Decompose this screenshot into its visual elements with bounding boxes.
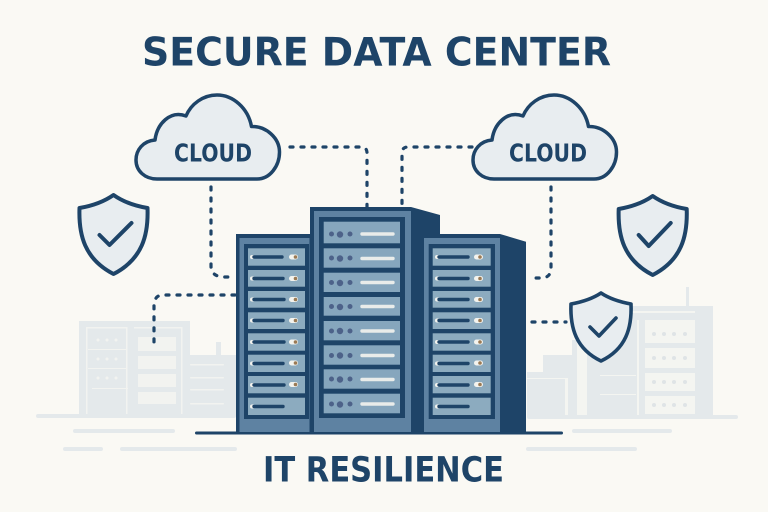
rack units — [433, 248, 491, 415]
background: right faded building — [526, 287, 738, 451]
left server rack — [236, 234, 312, 432]
icon: upper right shield — [619, 196, 687, 275]
centre server rack — [310, 207, 500, 432]
icon: right cloud — [473, 95, 616, 179]
right server rack — [424, 234, 526, 432]
icon: left shield — [79, 195, 148, 274]
icon: lower right shield — [571, 293, 631, 361]
dotted connectors — [154, 147, 566, 343]
caption: IT RESILIENCE — [263, 450, 504, 490]
rack units — [324, 222, 400, 413]
title: SECURE DATA CENTER — [142, 30, 611, 76]
background: left faded building — [36, 321, 237, 451]
icon: left cloud: CLOUD — [174, 138, 252, 168]
icon: right cloud: CLOUD — [509, 138, 587, 168]
server base line — [195, 432, 563, 434]
rack units — [248, 248, 305, 415]
icon: left cloud — [136, 95, 280, 179]
